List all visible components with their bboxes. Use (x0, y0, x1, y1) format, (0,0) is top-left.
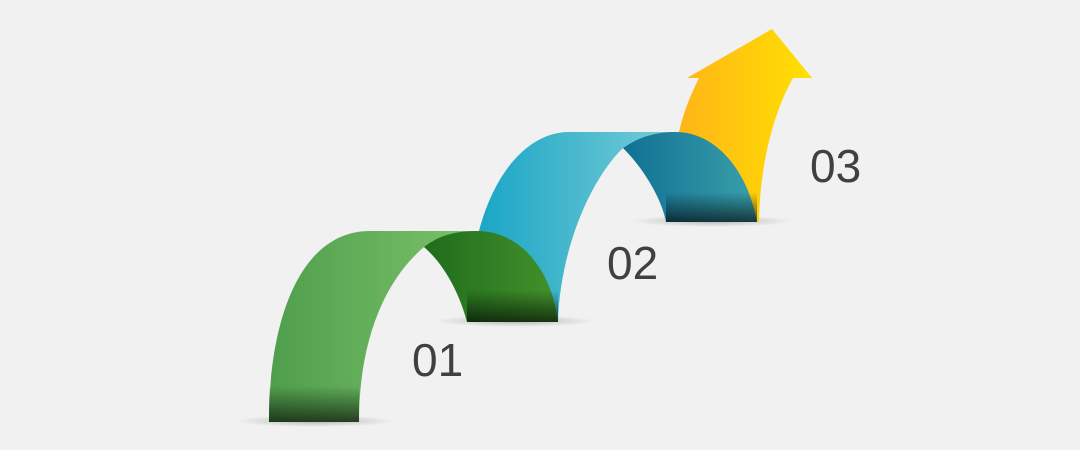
arrow step 3: yellow (670, 29, 812, 222)
label 02: 02 (607, 237, 658, 289)
arc step 1: green (269, 231, 558, 422)
label 01: 01 (412, 334, 463, 386)
arc step 2: blue (479, 132, 757, 322)
label 03: 03 (810, 140, 861, 192)
floor shadows (235, 215, 792, 427)
